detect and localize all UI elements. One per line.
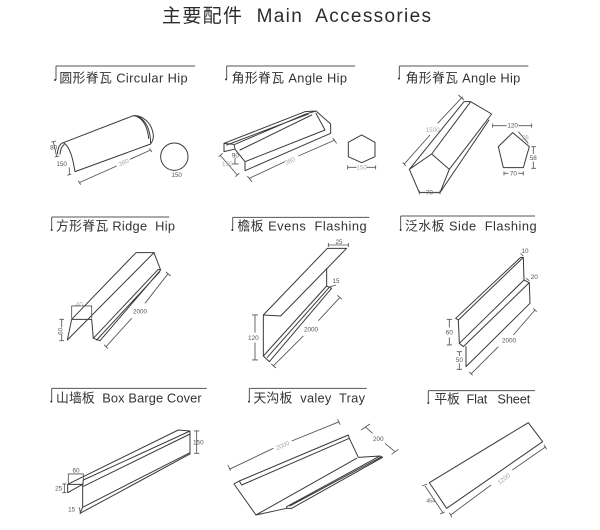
panel: evens flashing: 2000 [304,326,319,333]
panel: circular hip: 380 [118,158,131,168]
drawing: ridge hip [67,253,161,341]
heading: angle hip pentagon: 角形脊瓦 Angle Hip [406,71,520,86]
heading: angle hip: 角形脊瓦 Angle Hip [232,71,347,86]
dimensions: angle hip [219,138,337,182]
panel: side flashing: 10 [521,248,529,255]
heading: valley tray: 天沟板 valey Tray [253,391,366,406]
heading: circular hip: 圆形脊瓦 Circular Hip [59,71,188,86]
panel: valley tray: 2000 [275,440,291,452]
panel: evens flashing [231,217,369,368]
drawing: circular hip tile [57,116,153,172]
drawing: box barge cover [68,430,190,513]
panel: ridge hip [51,217,175,349]
panel: angle hip pentagon: 70 [426,189,433,196]
heading: side flashing: 泛水板 Side Flashing [405,218,537,233]
panel: flat sheet [422,391,547,517]
panel: ridge hip: 40 [76,302,83,309]
panel: valley tray [228,388,398,515]
panel: box barge cover: 25 [55,486,63,493]
panel: evens flashing: 25 [335,239,343,246]
dimensions: box barge cover [62,431,199,514]
cross-section: pentagon [498,133,529,168]
heading: flat sheet: 平板 Flat Sheet [434,392,531,407]
panel: side flashing: 2000 [502,338,517,345]
panel: angle hip pentagon: 28 [522,134,529,141]
heading: evens flashing: 檐板 Evens Flashing [237,218,367,233]
panel: valley tray: 200 [373,436,384,443]
drawing: angle hip tile [224,111,331,171]
cross-section: hexagon [348,135,375,163]
panel: side flashing: 50 [456,357,463,364]
panel: circular hip [50,66,195,185]
panel: box barge cover: 60 [72,468,80,475]
drawing: flat sheet [429,423,543,508]
panel: angle hip pentagon [398,66,537,196]
panel: side flashing: 20 [531,274,538,281]
dimensions: flat sheet [422,445,547,517]
dimensions: pentagon tile [403,95,464,194]
dimensions: circular hip [51,141,152,185]
panel: box barge cover: 150 [193,439,204,446]
panel: evens flashing: 120 [248,335,259,342]
panel: side flashing [400,216,538,375]
panel: angle hip: 150 [356,164,367,171]
drawing: valley tray [234,435,383,515]
panel: circular hip: 150 [56,161,67,168]
panel: side flashing: 60 [446,329,453,336]
panel: angle hip pentagon: 70 [510,171,517,178]
heading: box barge cover: 山墙板 Box Barge Cover [56,391,202,406]
panel: angle hip pentagon: 58 [530,155,537,162]
panel: angle hip [219,66,376,182]
panel: angle hip: 380 [284,156,297,167]
drawing: pentagon tile [409,102,492,193]
dimensions: side flashing [447,253,537,375]
panel: angle hip pentagon: 1500 [426,127,440,134]
panel: angle hip: 150 [222,161,233,168]
panel: evens flashing: 15 [332,278,340,285]
cross-section: circle [161,143,188,170]
drawing: side flashing [456,257,530,367]
panel: box barge cover: 15 [68,506,76,513]
panel: ridge hip: 60 [58,327,65,335]
panel: box barge cover [50,388,207,514]
panel: circular hip: 150 [171,172,182,179]
panel: angle hip: 90 [232,152,239,159]
dimensions: evens flashing [252,243,348,368]
dimensions: ridge hip [59,272,171,349]
panel: flat sheet: 454 [426,499,435,505]
dimensions: valley tray [228,419,398,471]
drawing: evens flashing [263,248,347,362]
panel: angle hip pentagon: 120 [507,123,518,130]
heading: ridge hip: 方形脊瓦 Ridge Hip [56,218,175,233]
title: 主要配件 Main Accessories [162,5,431,27]
panel: ridge hip: 2000 [133,308,148,315]
panel: circular hip: 80 [50,144,58,151]
panel: flat sheet: 1200 [497,472,512,486]
